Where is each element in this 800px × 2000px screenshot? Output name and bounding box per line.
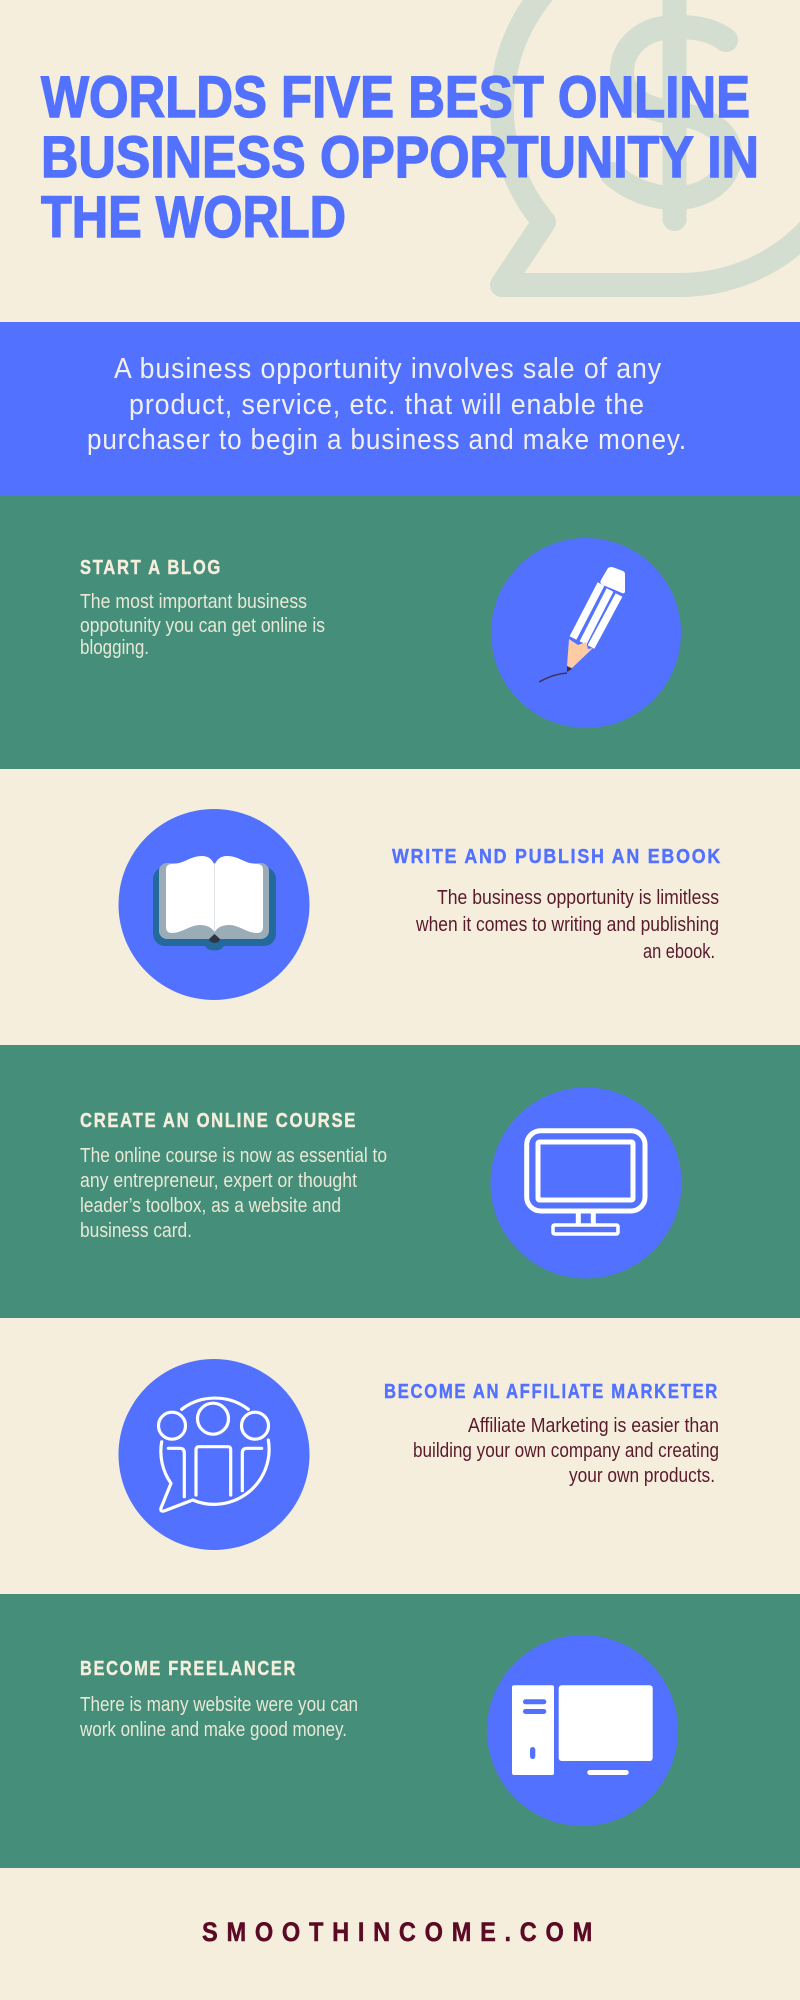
heading: start a blog: START A BLOG xyxy=(80,557,222,579)
icon: people in speech bubble xyxy=(118,1359,310,1550)
text: start a blog: blogging. xyxy=(80,637,149,659)
panel: write and publish an ebook xyxy=(0,769,800,1045)
text: write and publish an ebook: an ebook. xyxy=(643,941,715,963)
text: create an online course: any entrepreneur, expert or thought xyxy=(80,1170,357,1192)
text: write and publish an ebook: The business opportunity is limitless xyxy=(437,887,719,909)
panel: start a blog xyxy=(0,496,800,769)
icon: desktop computer xyxy=(487,1635,678,1826)
intro text: purchaser to begin a business and make money. xyxy=(87,424,687,456)
heading: create an online course: CREATE AN ONLINE COURSE xyxy=(80,1110,357,1132)
text: become an affiliate marketer: your own products. xyxy=(569,1465,715,1487)
text: create an online course: The online course is now as essential to xyxy=(80,1145,387,1167)
panel: header xyxy=(0,0,800,322)
heading: become an affiliate marketer: BECOME AN AFFILIATE MARKETER xyxy=(384,1381,719,1403)
text: become an affiliate marketer: building your own company and creating xyxy=(413,1440,719,1462)
title xyxy=(41,65,759,250)
text: start a blog: The most important business xyxy=(80,591,307,613)
icon: open book xyxy=(118,809,310,1000)
text: create an online course: business card. xyxy=(80,1220,192,1242)
intro text: A business opportunity involves sale of any xyxy=(114,353,662,385)
text: become freelancer xyxy=(79,1694,358,1741)
text: become an affiliate marketer: Affiliate Marketing is easier than xyxy=(468,1415,719,1437)
text: write and publish an ebook xyxy=(415,887,719,963)
footer website text: SMOOTHINCOME.COM xyxy=(202,1917,601,1947)
panel: footer xyxy=(0,1868,800,2000)
text: become freelancer: work online and make good money. xyxy=(79,1719,347,1741)
icon: dollar speech bubble watermark xyxy=(502,0,800,285)
text: write and publish an ebook: when it comes to writing and publishing xyxy=(415,914,719,936)
panel: become freelancer xyxy=(0,1594,800,1868)
text: become an affiliate marketer xyxy=(413,1415,719,1487)
panel: create an online course xyxy=(0,1045,800,1318)
title: THE WORLD xyxy=(41,185,346,250)
icon: pencil xyxy=(491,538,681,728)
panel: introduction band xyxy=(0,322,800,496)
text: become freelancer: There is many website were you can xyxy=(80,1694,358,1716)
text: start a blog: oppotunity you can get online is xyxy=(80,615,325,637)
heading: become freelancer: BECOME FREELANCER xyxy=(80,1658,297,1680)
intro text: product, service, etc. that will enable the xyxy=(129,389,645,421)
intro text xyxy=(87,353,687,456)
text: create an online course: leader’s toolbox, as a website and xyxy=(80,1195,341,1217)
icon: monitor xyxy=(490,1088,682,1278)
heading: write and publish an ebook: WRITE AND PUBLISH AN EBOOK xyxy=(392,846,722,868)
text: start a blog xyxy=(80,591,325,659)
panel: become an affiliate marketer xyxy=(0,1318,800,1594)
text: create an online course xyxy=(80,1145,387,1242)
